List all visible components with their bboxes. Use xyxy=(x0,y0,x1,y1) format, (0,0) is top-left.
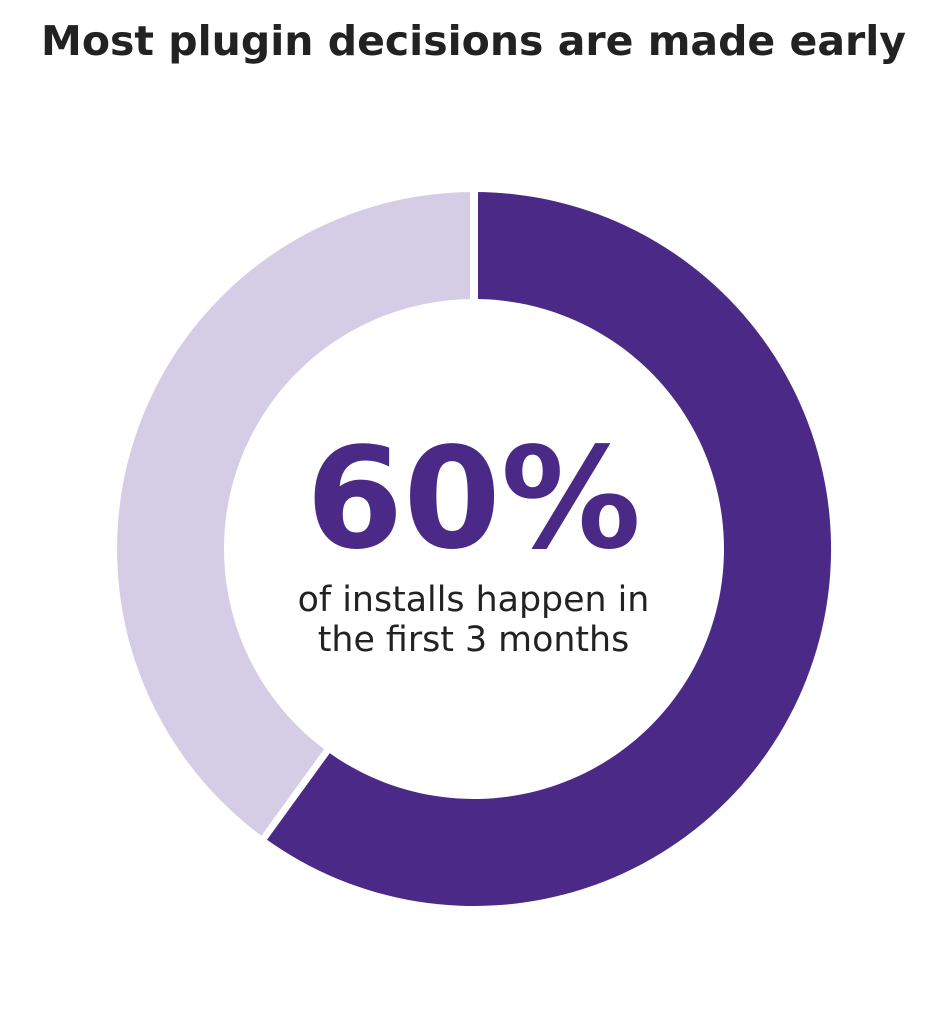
segment: later (40%) xyxy=(117,192,474,838)
segment: first 3 months (60%) xyxy=(264,192,831,906)
stat caption: of installs happen in xyxy=(298,580,649,620)
big stat: 60% xyxy=(306,418,641,581)
stat caption: the first 3 months xyxy=(318,620,629,660)
title: Most plugin decisions are made early xyxy=(41,17,906,65)
stat caption xyxy=(298,580,649,660)
